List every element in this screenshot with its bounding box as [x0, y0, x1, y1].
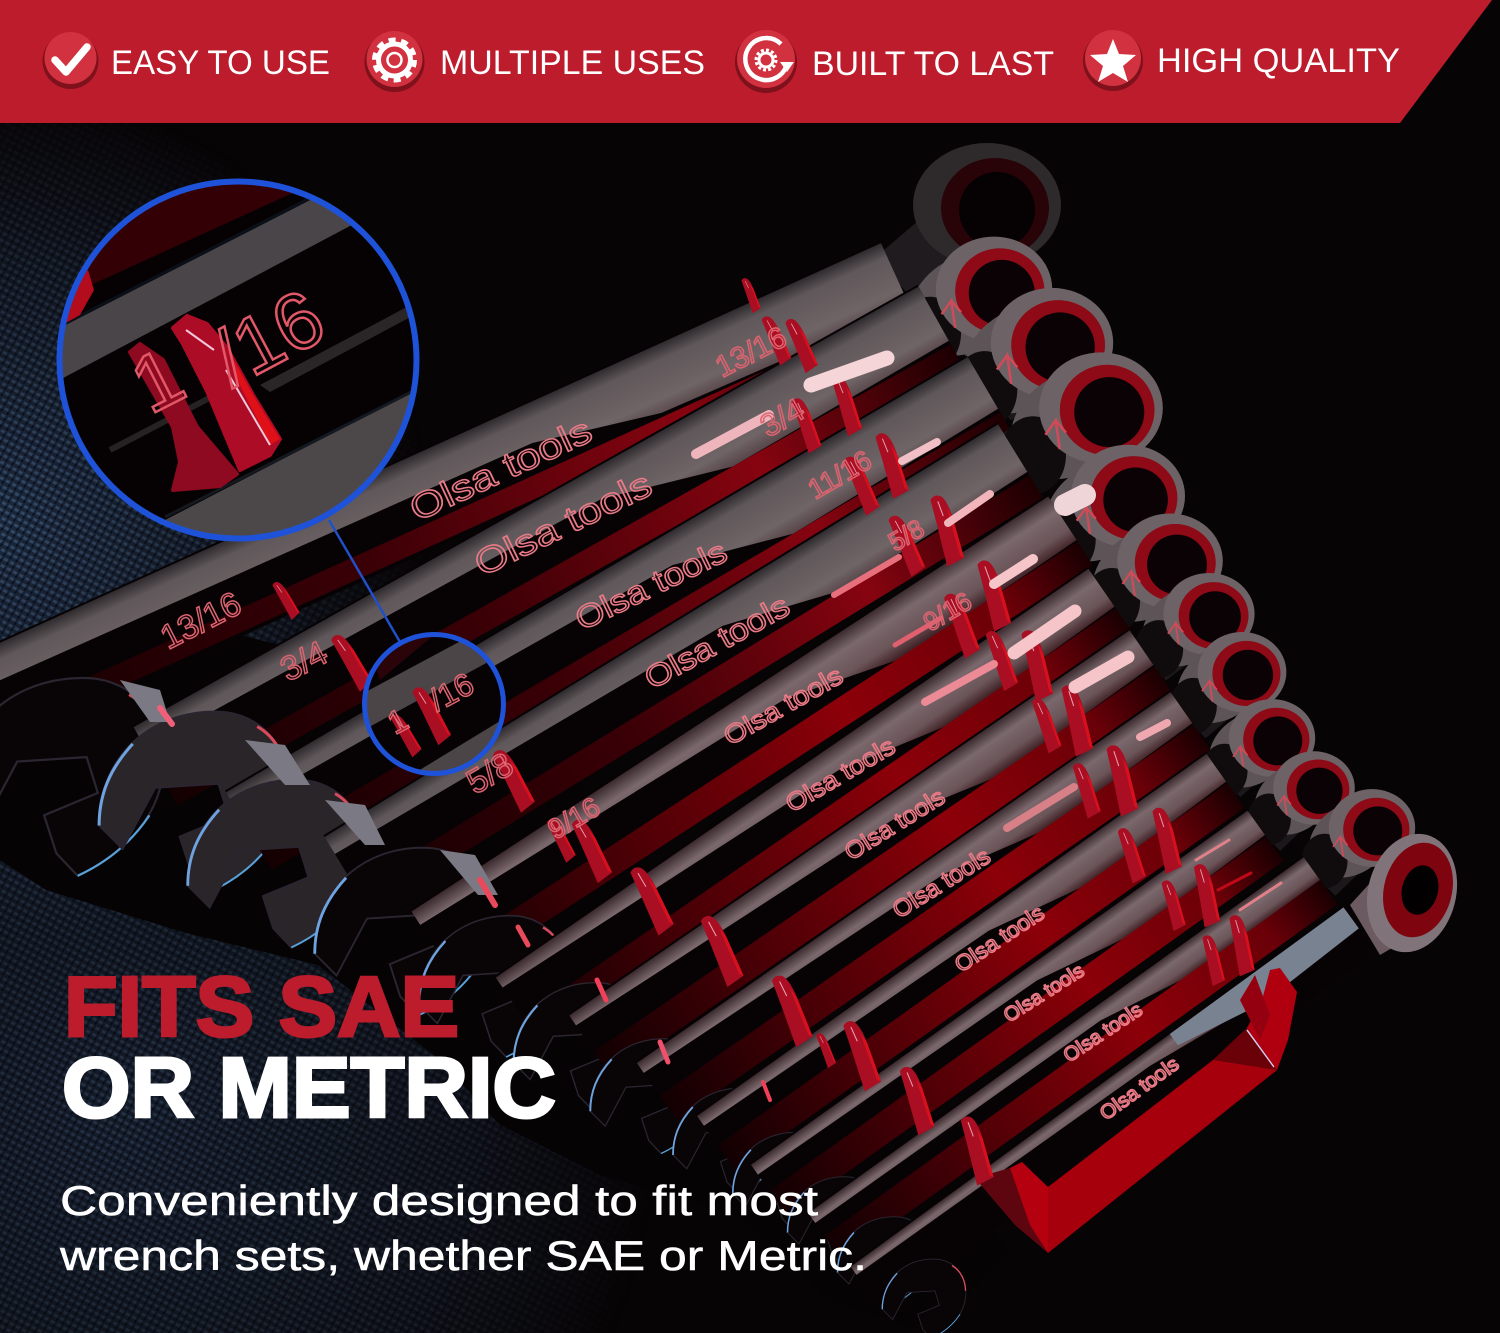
lower gray band [166, 394, 410, 536]
size label 9/16 right: 9/16 [918, 586, 977, 637]
background: blue textured cloth [0, 123, 606, 1333]
logo: wrench 7: Olsa tools [840, 783, 950, 866]
logo engravings [403, 409, 1183, 1125]
wrench 11 [807, 786, 1415, 1305]
red holder fingers [272, 276, 1255, 1186]
heading line 2: OR METRIC [62, 1041, 556, 1136]
label: MULTIPLE USES [440, 44, 705, 82]
logo: wrench 2: Olsa tools [468, 463, 658, 584]
icon: gear [364, 31, 424, 92]
maroon reflection top [86, 184, 292, 284]
wrench 4 (5/8) [315, 347, 1163, 1016]
small callout circle: 1 1/16 marking on wrench [362, 632, 506, 776]
feature: multiple uses [364, 31, 705, 92]
wrench 5 (9/16) [410, 440, 1185, 1057]
icon: check mark [42, 32, 98, 89]
front red finger [173, 316, 280, 470]
logo: wrench 1: Olsa tools [403, 409, 598, 529]
rear red finger [130, 344, 237, 490]
logo: wrench 8: Olsa tools [888, 843, 995, 924]
callout line joining the circles [329, 520, 400, 642]
wrench 3 (11/16) [188, 283, 1113, 948]
dark shadow mass beneath open ends [0, 600, 1010, 1333]
size label 5/8 left: 5/8 [460, 745, 520, 802]
label: HIGH QUALITY [1157, 42, 1400, 80]
logo: wrench 11: Olsa tools [1060, 999, 1147, 1067]
label: EASY TO USE [111, 44, 330, 82]
header ribbon [0, 0, 1492, 123]
size label 5/8 right: 5/8 [883, 513, 929, 557]
size engravings [154, 321, 977, 845]
logo: wrench 5: Olsa tools [718, 660, 848, 751]
size label 9/16 left: 9/16 [542, 791, 605, 845]
description text [59, 1177, 867, 1279]
wrench 7 [568, 569, 1255, 1154]
size label 11/16 right: 11/16 [802, 444, 877, 505]
label: BUILT TO LAST [812, 45, 1054, 83]
size label 3/4 left: 3/4 [274, 634, 334, 689]
small callout circle: 1 1/16 marking on wrench: 1 [381, 701, 414, 741]
wrench 8 [636, 628, 1286, 1194]
wrench 6 [495, 509, 1223, 1110]
feature: built to last [735, 30, 1054, 93]
logo: wrench 9: Olsa tools [950, 900, 1049, 977]
description line 2: wrench sets, whether SAE or Metric. [59, 1232, 867, 1279]
logo: wrench 12: Olsa tools [1096, 1053, 1183, 1125]
wrench 1 (13/16) [0, 143, 1061, 876]
large magnifier circle: 1 1/16 marking: /16 [198, 272, 338, 403]
heading [62, 960, 556, 1136]
red corner fragment [66, 270, 94, 322]
heading line 1: FITS SAE [64, 960, 459, 1055]
red holder tray [975, 968, 1297, 1253]
size label 13/16 right: 13/16 [710, 321, 792, 384]
icon: star [1083, 30, 1143, 91]
large magnifier circle: 1 1/16 marking [56, 178, 420, 542]
feature: high quality [1083, 30, 1400, 91]
wrench 10 [750, 748, 1355, 1265]
logo: wrench 6: Olsa tools [781, 732, 900, 818]
highlights on chrome handles [160, 358, 1281, 1100]
wrench 12 [849, 824, 1469, 1333]
logo: wrench 4: Olsa tools [638, 588, 795, 696]
size label 13/16 left: 13/16 [154, 585, 247, 657]
logo: wrench 3: Olsa tools [569, 533, 732, 637]
small callout circle: 1 1/16 marking on wrench: /16 [423, 666, 480, 718]
silver neck reflections [120, 680, 498, 895]
icon: gear with circular arrow [735, 30, 797, 93]
size label 3/4 right: 3/4 [754, 391, 810, 444]
logo: wrench 10: Olsa tools [1000, 960, 1088, 1027]
description line 1: Conveniently designed to fit most [60, 1177, 818, 1224]
upper gray band [62, 200, 350, 378]
wrench 9 [696, 696, 1315, 1230]
wrench 2 (3/4) [99, 232, 1052, 892]
middle groove [260, 308, 408, 392]
feature: easy to use [42, 32, 330, 89]
enlarged marking: 1 [117, 331, 197, 430]
